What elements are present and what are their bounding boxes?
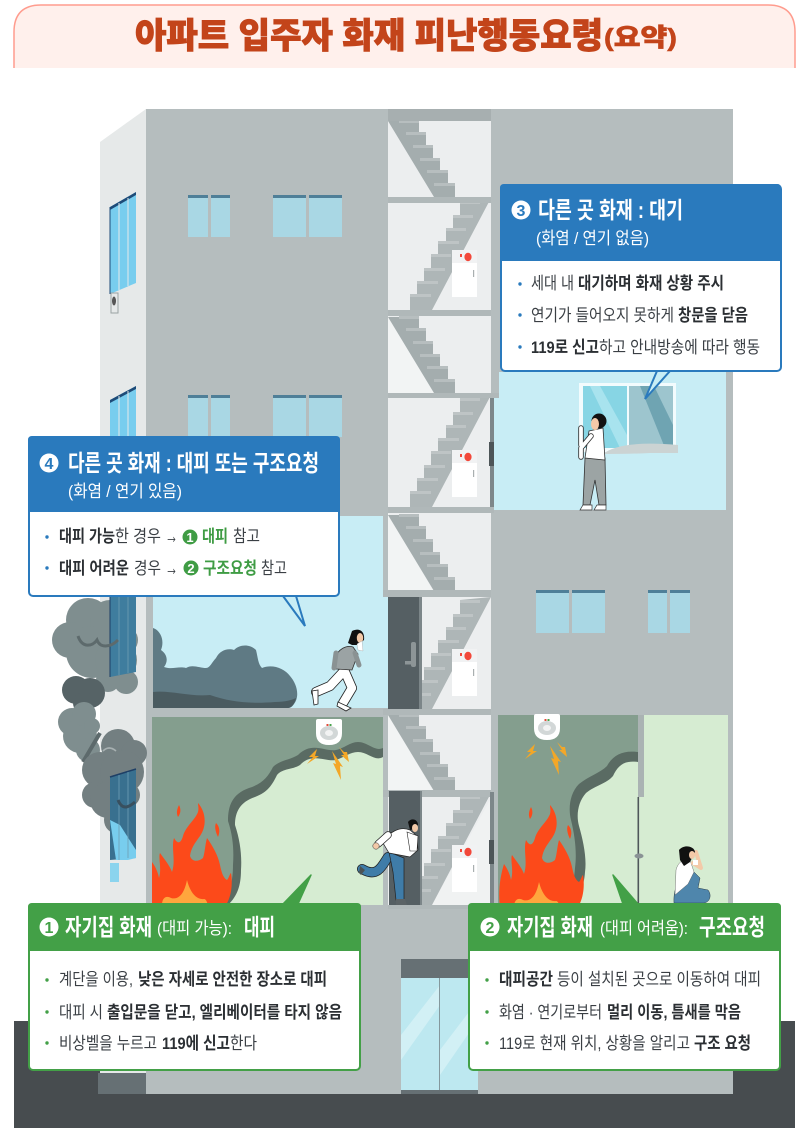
title text: 아파트 입주자 화재 피난행동요령: [135, 17, 603, 56]
smoke detector with alarm: [525, 714, 567, 775]
door on floor 3: [388, 597, 422, 709]
callout 2 body: 119로 현재 위치, 상황을 알리고: [499, 1034, 690, 1053]
callout 4 body: 구조요청: [203, 559, 257, 578]
callout 1 body: 계단을 이용,: [59, 970, 133, 989]
callout 2 body: 구조 요청: [694, 1034, 751, 1053]
callout 3: other unit fire, wait: [500, 184, 781, 399]
callout 4 header: [28, 436, 340, 512]
callout 3 header: (화염 / 연기 없음): [536, 229, 649, 248]
flame: [147, 803, 232, 905]
callout 2 header: (대피 어려움):: [600, 919, 688, 938]
callout 4 body: 1: [186, 530, 194, 545]
callout 4 header: (화염 / 연기 있음): [68, 482, 182, 501]
callout 4 body: 한 경우: [115, 527, 161, 546]
callout 4 body: 참고: [261, 559, 287, 578]
front windows: [188, 195, 690, 633]
callout 3 body: 대기하며 화재 상황 주시: [578, 274, 724, 293]
callout 4: other unit fire, evacuate or request rescue: [28, 436, 340, 626]
callout 3 body: [518, 274, 760, 357]
upper plume: [52, 598, 138, 694]
callout 1 header: 자기집 화재: [65, 914, 152, 940]
callout 3 body: 세대 내: [531, 274, 574, 293]
door on floor 2: [389, 791, 494, 905]
callout 2 body: 등이 설치된 곳으로 이동하여 대피: [557, 970, 761, 989]
callout 1 body: 출입문을 닫고, 엘리베이터를 타지 않음: [107, 1003, 342, 1022]
callout 4 body: 경우: [134, 559, 161, 578]
stairwell: [383, 109, 499, 909]
callout 3 body: 하고 안내방송에 따라 행동: [599, 338, 760, 357]
callout 4 header: 4: [45, 456, 54, 473]
callout 1 body: [45, 970, 342, 1053]
smoke plumes outside: [52, 597, 147, 882]
callout 1 body: 비상벨을 누르고: [59, 1034, 157, 1053]
callout 4 body: →: [165, 523, 178, 548]
callout 2 body: 대피공간: [499, 970, 553, 989]
person fleeing through door: [359, 819, 418, 905]
title text: (요약): [604, 24, 677, 52]
callout 2 header: 2: [486, 920, 495, 937]
callout 2 body: 화염 · 연기로부터: [499, 1003, 602, 1022]
building side wall: [98, 109, 146, 1094]
flame: [499, 805, 584, 907]
title banner: [14, 5, 795, 68]
callout 4 header: 다른 곳 화재 : 대피 또는 구조요청: [68, 450, 319, 476]
apartment 4 room: [153, 516, 388, 711]
callout 2 header: [468, 903, 781, 951]
callout 2 body: [485, 970, 761, 1053]
callout 4 body: [45, 523, 287, 580]
callout 2 body: 멀리 이동, 틈새를 막음: [607, 1003, 741, 1022]
ground: [14, 1021, 795, 1128]
person fleeing with cloth: [312, 630, 364, 711]
callout 4 body: 2: [187, 561, 195, 576]
callout 4 body: 대피 가능: [59, 527, 115, 546]
callout 1 header: [28, 903, 361, 951]
window: [579, 383, 678, 454]
person waiting for rescue: [674, 846, 710, 903]
callout 2 header: 자기집 화재: [507, 914, 593, 940]
callout 1 header: 1: [45, 920, 54, 937]
callout 1: own unit fire, evacuation possible: [28, 875, 361, 1070]
callout 1 header: (대피 가능):: [157, 919, 232, 938]
callout 1 body: 낮은 자세로 안전한 장소로 대피: [138, 970, 327, 989]
apartment 1 room: [147, 717, 383, 905]
callout 4 body: 대피: [202, 527, 228, 546]
callout 4 body: 대피 어려운: [59, 559, 129, 578]
callout 4 body: 참고: [233, 527, 260, 546]
evacuation partition: [634, 715, 644, 905]
smoke layer: [152, 717, 383, 905]
person waiting: [580, 414, 606, 510]
callout 4 body: →: [165, 555, 178, 580]
building: [98, 109, 733, 1094]
smoke layer: [498, 715, 638, 905]
callout 1 body: 대피 시: [59, 1003, 103, 1022]
callout 3 body: 창문을 닫음: [678, 306, 748, 325]
apartment 2 room: [498, 714, 728, 907]
callout 3 body: 119로 신고: [531, 338, 599, 357]
building entrance: [401, 959, 478, 1094]
building front wall: [146, 109, 733, 1094]
callout 1 header: 대피: [244, 914, 275, 940]
smoke detector with alarm: [307, 719, 349, 780]
apartment 3 room: [489, 372, 726, 510]
side windows: [110, 192, 136, 490]
lower plume: [82, 729, 147, 834]
callout 3 header: 다른 곳 화재 : 대기: [538, 197, 683, 223]
callout 2: own unit fire, evacuation difficult: [468, 875, 781, 1070]
callout 3 header: 3: [517, 203, 526, 220]
callout 1 body: 한다: [230, 1034, 257, 1053]
plume neck: [62, 676, 105, 714]
room smoke: [153, 628, 297, 708]
callout 1 body: 119에 신고: [162, 1034, 230, 1053]
windows behind smoke: [110, 597, 136, 882]
callout 3 body: 연기가 들어오지 못하게: [531, 306, 674, 325]
building base shadow: [98, 1073, 146, 1094]
callout 3 header: [500, 184, 781, 261]
callout 2 header: 구조요청: [699, 914, 765, 940]
